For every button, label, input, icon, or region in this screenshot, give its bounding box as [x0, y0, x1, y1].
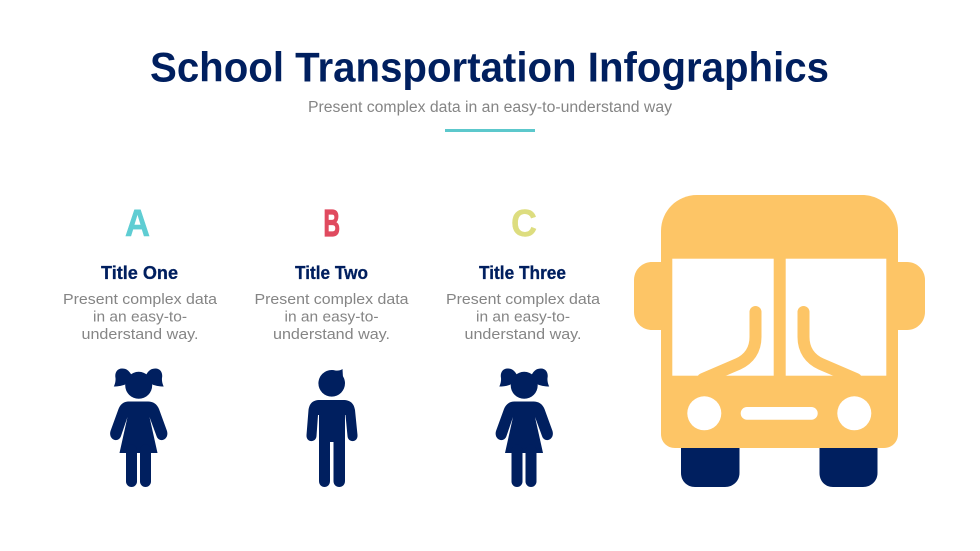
- icon: girl: [110, 368, 167, 482]
- title underline: [445, 129, 535, 132]
- body text B: understand way.: [273, 327, 390, 343]
- wheel left: [681, 440, 740, 487]
- heading: Title One: Title One: [101, 263, 178, 283]
- icon: girl: [496, 368, 553, 482]
- headlight right: [837, 396, 871, 430]
- title: School Transportation Infographics: [150, 44, 829, 90]
- body text B: [254, 292, 410, 343]
- body text A: [63, 292, 218, 343]
- panel: column C: [446, 203, 601, 482]
- wheel right: [820, 440, 878, 487]
- grille: [741, 407, 818, 420]
- bus body: [661, 195, 898, 448]
- body text B: in an easy-to-: [284, 310, 379, 326]
- wiper left: [703, 312, 756, 379]
- wiper right: [804, 312, 856, 379]
- letter B: B: [324, 203, 340, 245]
- body text C: in an easy-to-: [476, 310, 570, 326]
- panel: column A: [63, 203, 218, 482]
- body text A: in an easy-to-: [93, 310, 187, 326]
- letter C: C: [511, 203, 537, 245]
- panel: column B: [254, 203, 410, 487]
- windshield left: [672, 259, 774, 376]
- icon: boy: [306, 369, 358, 487]
- headlight left: [687, 396, 721, 430]
- letter A: A: [125, 203, 150, 245]
- body text A: understand way.: [82, 327, 198, 343]
- subtitle: Present complex data in an easy-to-understand way: [308, 99, 672, 116]
- heading: Title Two: Title Two: [295, 263, 368, 283]
- body text A: Present complex data: [63, 292, 218, 308]
- mirrors: [634, 262, 925, 330]
- windshield right: [786, 259, 886, 376]
- body text B: Present complex data: [254, 292, 410, 308]
- body text C: Present complex data: [446, 292, 601, 308]
- body text C: understand way.: [464, 327, 582, 343]
- body text C: [446, 292, 601, 343]
- heading: Title Three: Title Three: [479, 263, 566, 283]
- icon: school bus: [634, 195, 925, 487]
